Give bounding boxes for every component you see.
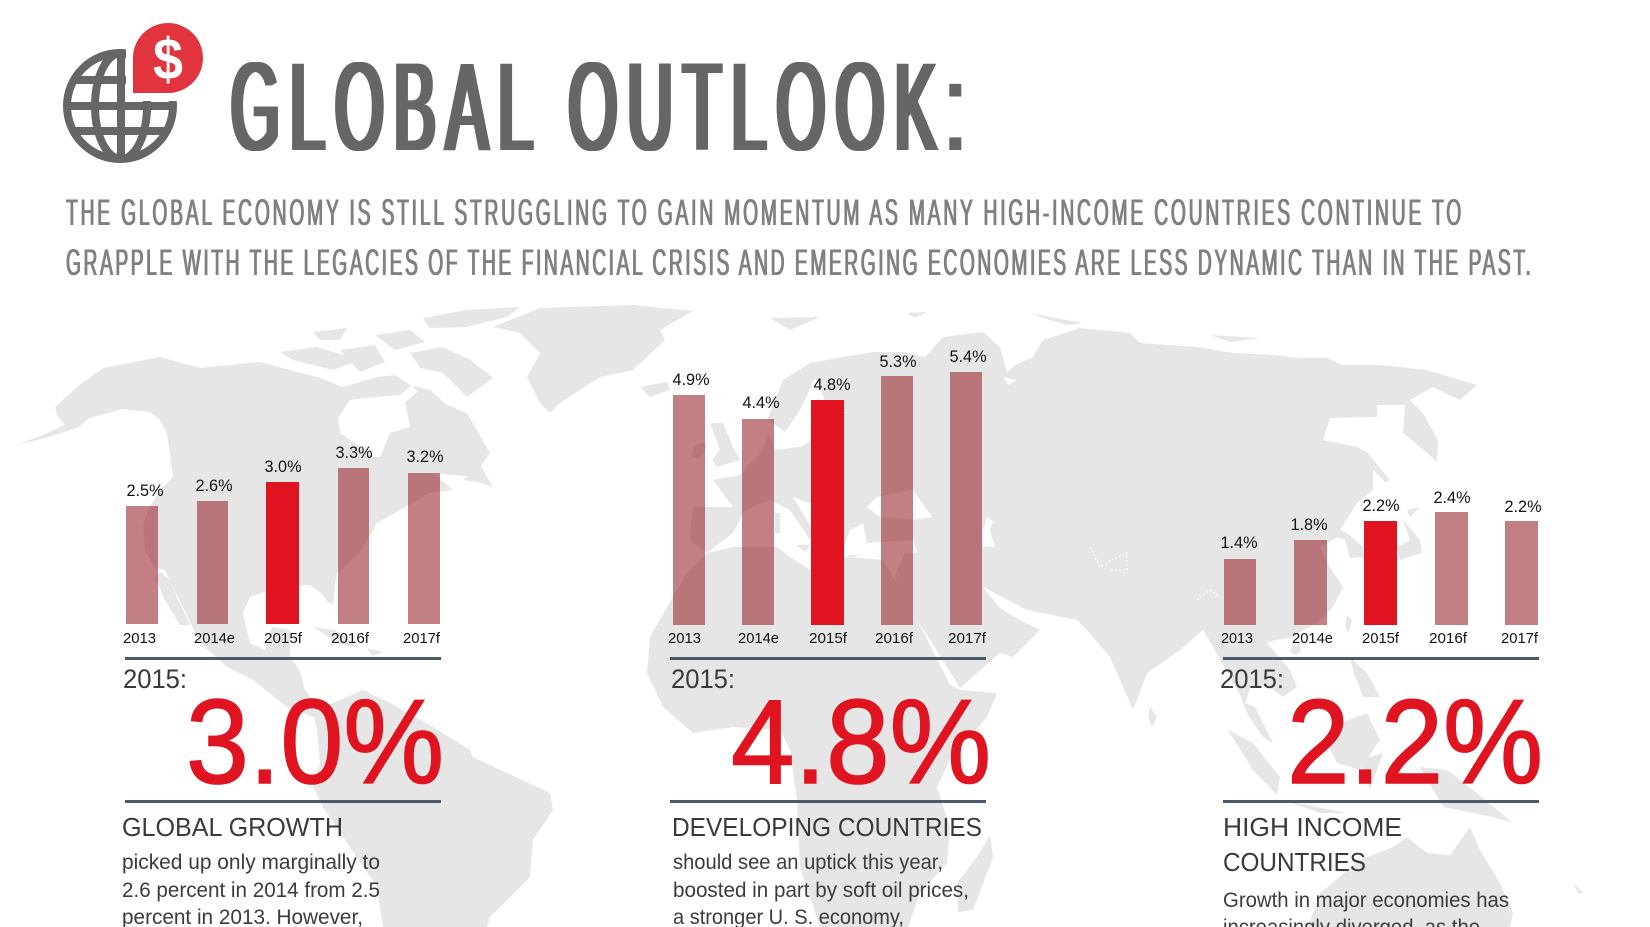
map: Newfoundland and Caribbean xyxy=(313,465,493,656)
icon: dollar bubble xyxy=(126,20,210,101)
heading xyxy=(1223,812,1402,877)
bar chart: global growth: 2015f xyxy=(264,630,303,647)
heading: GLOBAL GROWTH xyxy=(122,812,343,842)
bar chart: developing countries: 5.3% xyxy=(880,352,916,371)
map: Southeast Asia islands xyxy=(1228,657,1383,813)
heading: DEVELOPING COUNTRIES xyxy=(672,812,982,842)
bar chart: high income countries: 1.4% xyxy=(1220,533,1258,552)
map: inland seas xyxy=(338,377,1017,547)
map: Eurasia xyxy=(690,328,1477,743)
bar chart: global growth: 2013 xyxy=(123,630,156,647)
heading: HIGH INCOME xyxy=(1223,812,1402,842)
bar chart: global growth: 2014e xyxy=(194,630,235,647)
bar chart: developing countries: 2016f xyxy=(875,630,914,647)
map: Russian Arctic islands xyxy=(770,312,1260,342)
bar chart: global growth: 2016f xyxy=(331,630,370,647)
bar chart: high income countries: 2013 xyxy=(1221,630,1253,647)
bar chart: high income countries: 1.8% xyxy=(1290,515,1328,534)
bar chart: global growth xyxy=(123,443,444,647)
bar chart: global growth: 3.3% xyxy=(336,443,372,462)
big number: 2.2% xyxy=(1287,675,1543,809)
bar chart: high income countries: 2014e xyxy=(1292,630,1333,647)
icon: globe with dollar badge xyxy=(67,20,210,159)
body text: 2.6 percent in 2014 from 2.5 xyxy=(122,879,380,902)
icon: globe xyxy=(67,53,174,159)
bar chart: global growth: 2.6% xyxy=(196,476,232,495)
body text: should see an uptick this year, xyxy=(673,851,943,874)
body text xyxy=(122,851,380,927)
bar chart: developing countries: 4.4% xyxy=(742,393,780,412)
bar chart: developing countries: 4.8% xyxy=(814,375,850,394)
bar chart: developing countries: 5.4% xyxy=(950,347,986,366)
bar chart: high income countries: 2.4% xyxy=(1434,488,1470,507)
map: Arctic islands xyxy=(280,307,520,397)
map: Greenland xyxy=(493,305,693,413)
big number: 4.8% xyxy=(731,675,991,809)
bar chart: high income countries: 2.2% xyxy=(1362,496,1400,515)
map: Madagascar xyxy=(957,835,993,912)
panel: developing countries xyxy=(668,347,991,927)
heading: COUNTRIES xyxy=(1223,847,1366,877)
body text xyxy=(1223,889,1509,927)
big number: 3.0% xyxy=(186,675,444,809)
bar chart: global growth: 3.2% xyxy=(406,447,444,466)
map: North America xyxy=(16,357,490,717)
map: Baja California xyxy=(155,572,190,625)
map: South America xyxy=(313,690,553,927)
bar chart: high income countries: 2017f xyxy=(1501,630,1539,647)
bar chart: global growth: 2017f xyxy=(403,630,441,647)
map: New Guinea xyxy=(1420,767,1513,823)
icon: dollar bubble: $ xyxy=(153,27,183,92)
subtitle xyxy=(66,192,1531,284)
bar chart: high income countries: 2015f xyxy=(1362,630,1400,647)
year label: 2015: xyxy=(671,664,735,694)
panel: global growth xyxy=(122,443,444,927)
bar chart: developing countries xyxy=(668,347,987,647)
world map background xyxy=(16,305,1583,927)
map: Iceland, Ireland, Britain xyxy=(640,382,740,467)
bar chart: high income countries: 2.2% xyxy=(1504,497,1542,516)
panel: high income countries xyxy=(1220,488,1543,927)
bar chart: global growth: 3.0% xyxy=(264,457,302,476)
bar chart: developing countries: 2017f xyxy=(948,630,987,647)
body text: boosted in part by soft oil prices, xyxy=(673,879,969,902)
year label: 2015: xyxy=(123,664,187,694)
subtitle: GRAPPLE WITH THE LEGACIES OF THE FINANCIAL CRISIS AND EMERGING ECONOMIES ARE LESS DYNAMIC THAN IN THE PAST. xyxy=(66,242,1531,284)
bar chart: developing countries: 2015f xyxy=(809,630,848,647)
bar chart: developing countries: 2014e xyxy=(738,630,779,647)
map: Africa xyxy=(647,547,997,927)
body text xyxy=(673,851,969,927)
map: Mediterranean islands xyxy=(775,513,860,558)
body text: picked up only marginally to xyxy=(122,851,380,874)
map: Australia xyxy=(1308,827,1513,927)
map: New Zealand xyxy=(1573,883,1583,893)
year label: 2015: xyxy=(1220,664,1284,694)
subtitle: THE GLOBAL ECONOMY IS STILL STRUGGLING TO GAIN MOMENTUM AS MANY HIGH-INCOME COUNTRIES CONTINUE TO xyxy=(66,192,1461,234)
map: Sakhalin, Japan, Taiwan, Hainan, Sri Lanka xyxy=(1148,447,1422,727)
body text: Growth in major economies has xyxy=(1223,889,1509,912)
bar chart: developing countries: 4.9% xyxy=(672,370,710,389)
bar chart: high income countries: 2016f xyxy=(1429,630,1468,647)
bar chart: developing countries: 2013 xyxy=(668,630,701,647)
bar chart: high income countries xyxy=(1220,488,1542,647)
title: GLOBAL OUTLOOK: xyxy=(231,37,964,177)
bar chart: global growth: 2.5% xyxy=(126,481,164,500)
